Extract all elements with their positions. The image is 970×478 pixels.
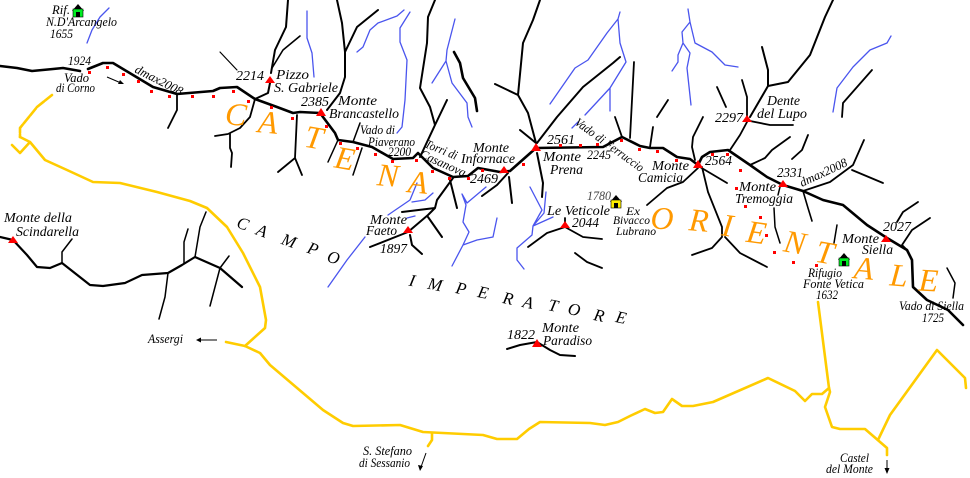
labels: southern places: del Monte: [826, 462, 873, 476]
labels: western ridge: Rif.: [51, 3, 70, 17]
heading: CATENA ORIENTALE: A: [851, 249, 876, 287]
labels: western ridge: Brancastello: [329, 107, 399, 122]
labels: central ridge: Casanova: [418, 147, 468, 180]
labels: central ridge: 1897: [380, 242, 408, 257]
labels: central ridge: Prena: [549, 163, 583, 178]
heading: CAMPO IMPERATORE: C: [234, 213, 252, 235]
labels: central ridge: Torri di: [423, 137, 460, 163]
labels: eastern ridge: Tremoggia: [735, 192, 793, 207]
heading: CAMPO IMPERATORE: E: [475, 282, 491, 303]
heading: CATENA ORIENTALE: R: [687, 201, 711, 239]
labels: southern places: Scindarella: [16, 225, 79, 240]
labels: central ridge: Monte: [542, 150, 581, 165]
labels: eastern ridge: 1632: [816, 288, 838, 302]
labels: eastern ridge: del Lupo: [757, 107, 807, 122]
heading: CAMPO IMPERATORE: M: [278, 229, 300, 252]
direction arrows: [107, 77, 890, 474]
labels: central ridge: Lubrano: [615, 226, 656, 238]
labels: western ridge: 2200: [388, 145, 412, 159]
route marked by red squares: [88, 66, 818, 267]
labels: central ridge: Camicia: [638, 171, 683, 186]
labels: western ridge: Vado di: [360, 123, 395, 137]
labels: southern places: Monte della: [3, 211, 72, 226]
labels: central ridge: Bivacco: [613, 215, 650, 227]
labels: western ridge: S. Gabriele: [274, 81, 338, 96]
heading: CAMPO IMPERATORE: A: [520, 292, 536, 313]
labels: central ridge: Monte: [369, 213, 407, 228]
labels: central ridge: Ex: [625, 206, 641, 218]
icon: refuge N.D'Arcangelo hut: [72, 4, 84, 17]
labels: central ridge: 2469: [470, 172, 498, 187]
labels: eastern ridge: 2331: [777, 166, 803, 181]
heading: CAMPO IMPERATORE: P: [453, 278, 468, 299]
labels: western ridge: 2385: [301, 95, 329, 110]
labels: central ridge: Monte: [472, 141, 509, 156]
heading: CAMPO IMPERATORE: [234, 213, 629, 328]
heading: CAMPO IMPERATORE: I: [406, 271, 418, 291]
labels: central ridge: 2044: [572, 216, 599, 231]
heading: CAMPO IMPERATORE: O: [325, 247, 342, 268]
labels: central ridge: Monte: [651, 159, 689, 174]
heading: CAMPO IMPERATORE: P: [304, 238, 321, 260]
labels: eastern ridge: 1725: [922, 311, 944, 325]
labels: western ridge: Pizzo: [275, 68, 309, 83]
labels: central ridge: 2245: [587, 148, 611, 162]
heading: CAMPO IMPERATORE: M: [425, 274, 445, 296]
icon: Rifugio Fonte Vetica hut: [838, 253, 850, 266]
road network in yellow: [12, 95, 966, 455]
heading: CAMPO IMPERATORE: E: [613, 307, 629, 328]
labels: southern places: di Sessanio: [359, 456, 410, 470]
labels: eastern ridge: Fonte Vetica: [802, 277, 864, 291]
heading: CAMPO IMPERATORE: R: [591, 305, 607, 326]
labels: central ridge: Vado di Ferruccio: [572, 115, 647, 175]
labels: western ridge: [45, 3, 415, 159]
heading: CATENA ORIENTALE: L: [888, 256, 909, 294]
heading: CATENA ORIENTALE: A: [405, 163, 430, 201]
labels: western ridge: N.D'Arcangelo: [45, 15, 117, 29]
labels: southern places: S. Stefano: [363, 444, 412, 458]
labels: western ridge: Vado: [64, 71, 89, 85]
labels: central ridge: Infornace: [460, 152, 515, 167]
side ridges in black: [62, 0, 955, 356]
heading: CATENA ORIENTALE: E: [743, 213, 769, 251]
main ridge line in black: [0, 63, 963, 325]
heading: CAMPO IMPERATORE: T: [547, 295, 561, 316]
labels: eastern ridge: 2297: [715, 111, 744, 126]
labels: western ridge: di Corno: [56, 81, 95, 95]
labels: southern places: Paradiso: [542, 334, 592, 349]
labels: western ridge: Monte: [337, 94, 377, 109]
labels: western ridge: 1655: [50, 27, 73, 41]
heading: CATENA ORIENTALE: T: [302, 118, 328, 157]
heading: CAMPO IMPERATORE: A: [253, 220, 271, 242]
heading: CATENA ORIENTALE: E: [917, 261, 940, 299]
labels: central ridge: Faeto: [365, 224, 397, 239]
labels: eastern ridge: Siella: [862, 243, 893, 258]
labels: eastern ridge: [715, 94, 964, 325]
labels: western ridge: 2214: [236, 69, 264, 84]
peak triangles in red: [8, 76, 891, 347]
labels: eastern ridge: Dente: [766, 94, 800, 109]
heading: CATENA ORIENTALE: C: [224, 95, 249, 133]
labels: eastern ridge: Rifugio: [807, 266, 842, 280]
heading: CAMPO IMPERATORE: R: [500, 288, 516, 309]
heading: CATENA ORIENTALE: [224, 95, 940, 299]
labels: eastern ridge: 2027: [883, 220, 912, 235]
heading: CAMPO IMPERATORE: O: [566, 299, 582, 320]
heading: CATENA ORIENTALE: O: [650, 200, 674, 236]
labels: western ridge: 1924: [68, 54, 91, 68]
labels: western ridge: Piaverano: [367, 135, 415, 149]
labels: western ridge: dmax2008: [133, 62, 186, 99]
labels: central ridge: 2561: [547, 133, 575, 148]
labels: southern places: Castel: [840, 451, 869, 465]
streams in blue: [87, 8, 891, 287]
heading: CATENA ORIENTALE: E: [331, 139, 358, 178]
labels: southern places: Monte: [541, 321, 579, 336]
labels: southern places: Assergi: [147, 332, 183, 346]
labels: southern places: [3, 211, 873, 476]
heading: CATENA ORIENTALE: N: [375, 156, 402, 194]
icon: Ex Bivacco Lubrano hut: [610, 195, 622, 208]
heading: CATENA ORIENTALE: A: [255, 103, 280, 141]
heading: CATENA ORIENTALE: T: [813, 233, 839, 272]
labels: central ridge: [365, 115, 732, 257]
labels: central ridge: 2564: [705, 154, 732, 169]
labels: southern places: 1822: [507, 328, 535, 343]
heading: CATENA ORIENTALE: I: [719, 206, 737, 244]
heading: CATENA ORIENTALE: N: [780, 222, 810, 262]
labels: central ridge: 1780: [587, 189, 612, 203]
labels: eastern ridge: Monte: [738, 180, 776, 195]
labels: eastern ridge: dmax2008: [797, 155, 850, 190]
labels: eastern ridge: Vado di Siella: [899, 299, 964, 313]
labels: eastern ridge: Monte: [841, 232, 879, 247]
labels: central ridge: Le Veticole: [546, 204, 610, 219]
